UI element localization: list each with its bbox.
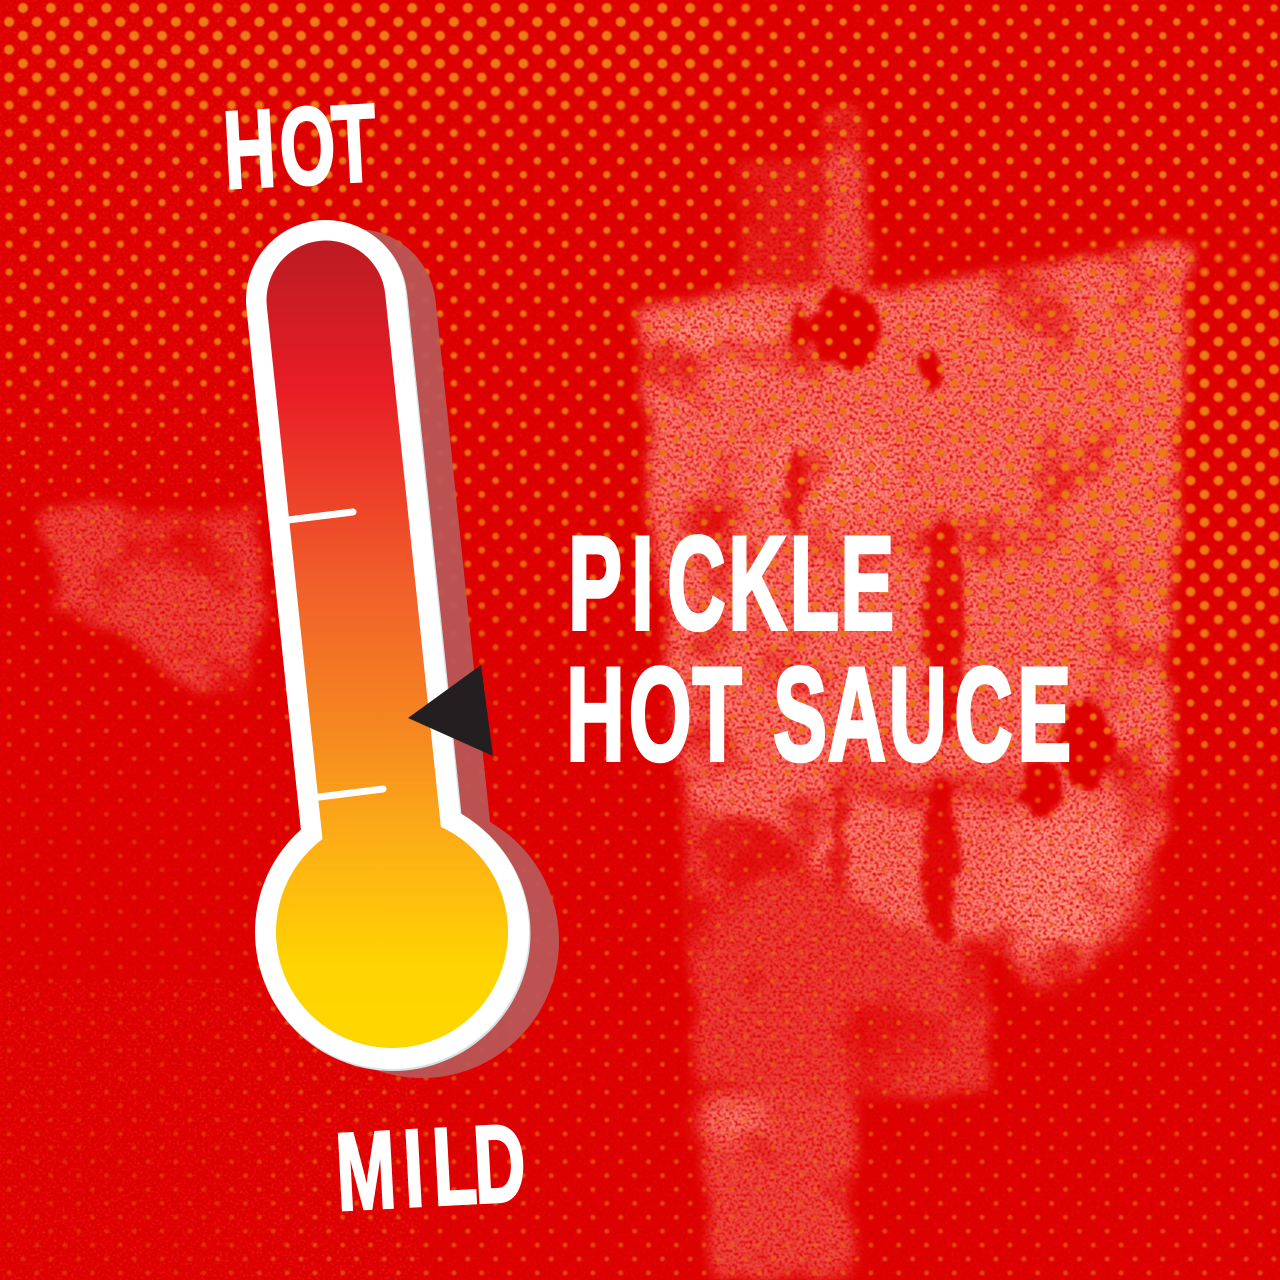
thermometer gradient fill — [276, 300, 508, 1048]
upper tick mark — [288, 512, 353, 520]
label: MILD: MILD — [333, 1101, 528, 1234]
title line 2: HOT SAUCE — [566, 640, 1071, 789]
thermometer white casing — [255, 300, 529, 1069]
thermometer edge highlight — [256, 302, 530, 1071]
label: HOT: HOT — [221, 81, 379, 212]
lower tick mark — [319, 789, 383, 797]
thermometer cast shadow — [285, 309, 559, 1078]
thermometer — [255, 300, 559, 1078]
title line 1: PICKLE — [568, 509, 894, 658]
title: Pickle Hot Sauce — [566, 509, 1071, 789]
arrow: heat level pointer — [408, 665, 493, 756]
